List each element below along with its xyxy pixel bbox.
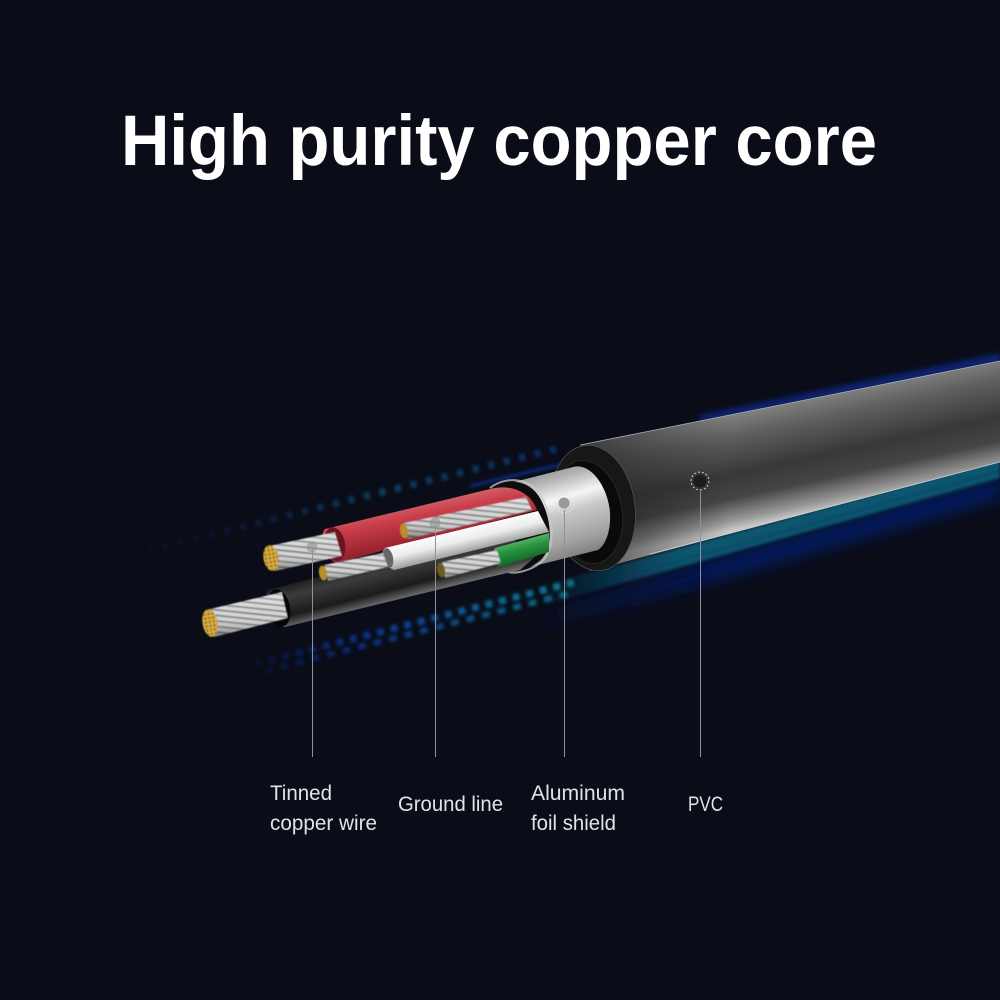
copper end	[436, 562, 446, 578]
copper end	[200, 608, 220, 638]
callout: PVC: PVC	[688, 793, 723, 816]
title: High purity copper core	[121, 102, 877, 181]
callout: ground line	[398, 518, 503, 816]
tinned strand: white wire	[318, 553, 388, 581]
callout: aluminum foil shield: Aluminum	[531, 782, 625, 805]
light trails behind the cable	[100, 353, 1000, 671]
callout: tinned copper wire: Tinned	[270, 782, 332, 805]
callout: aluminum foil shield: foil shield	[531, 812, 616, 835]
tinned strand: upper middle	[399, 497, 532, 539]
foil opening	[490, 482, 550, 572]
tinned strand: black wire	[200, 592, 288, 638]
callout: tinned copper wire: copper wire	[270, 812, 377, 835]
callout: tinned copper wire	[270, 542, 377, 835]
PVC cable jacket	[543, 361, 1000, 576]
copper end	[261, 544, 281, 572]
copper end	[318, 565, 328, 581]
callout: PVC	[688, 472, 723, 816]
jacket end face	[543, 440, 643, 576]
green wire	[493, 533, 549, 567]
tinned strand: green wire	[436, 550, 501, 578]
white ground wire	[381, 511, 549, 570]
tinned strand: red wire	[261, 532, 342, 572]
aluminum foil shield	[490, 466, 610, 573]
red wire	[322, 487, 537, 563]
callout: aluminum foil shield	[531, 495, 625, 835]
callout: ground line: Ground line	[398, 793, 503, 816]
black wire	[264, 530, 536, 629]
copper end	[399, 523, 409, 539]
